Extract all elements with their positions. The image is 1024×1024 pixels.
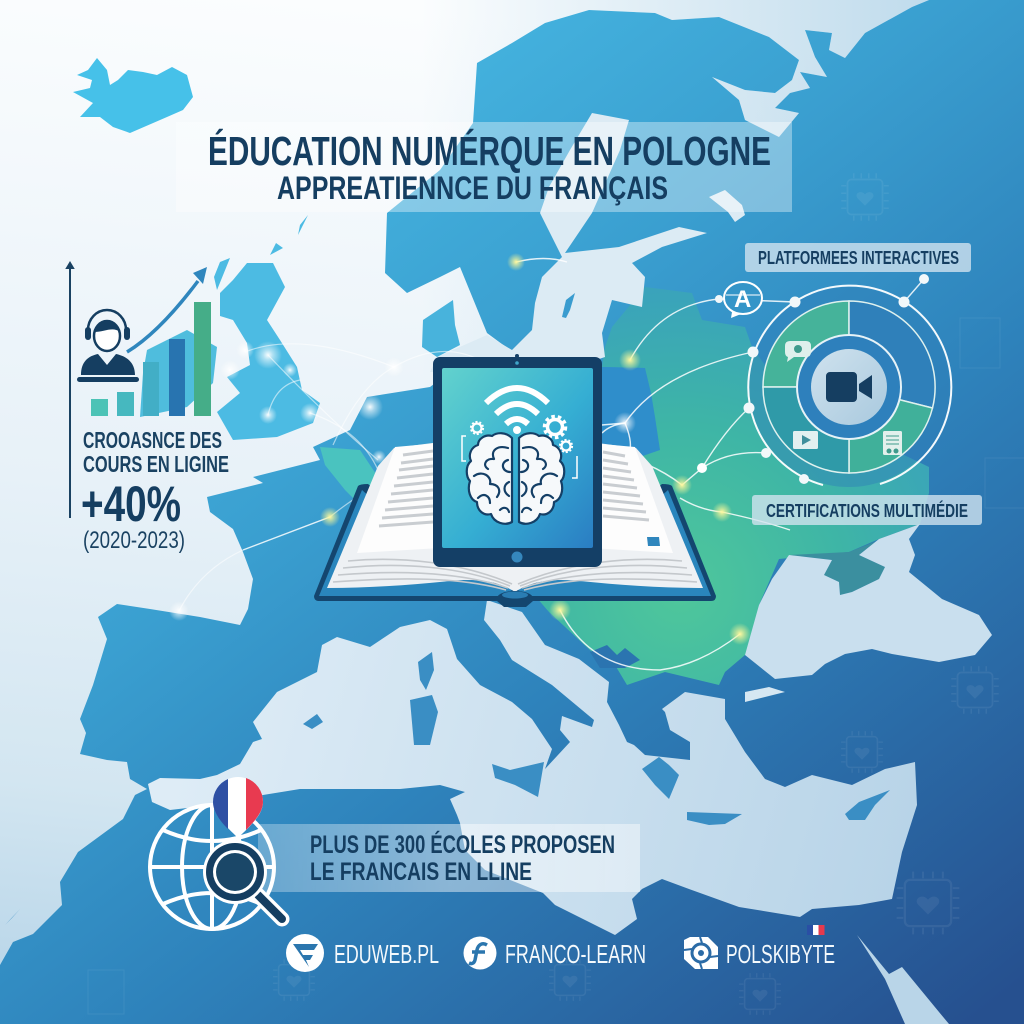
icon: brackets xyxy=(462,436,577,478)
pale sea: Baltic xyxy=(430,113,707,372)
pale sea: Marmara xyxy=(745,687,785,702)
growth label: CROOASNCE DES xyxy=(83,427,222,453)
logo: franco-learn xyxy=(464,936,496,970)
logo: polskibyte xyxy=(684,937,718,969)
green region: Eastern Europe xyxy=(530,287,929,685)
title panel xyxy=(176,122,792,212)
bookmark square xyxy=(647,537,660,546)
vertical axis xyxy=(67,263,73,518)
left page lines xyxy=(379,451,433,526)
ring nodes xyxy=(715,274,929,484)
cover inner band xyxy=(319,490,711,596)
Scottish islands xyxy=(214,215,308,290)
right pages xyxy=(515,442,703,592)
pale lake: Ladoga xyxy=(709,190,745,222)
pale sea: Red Sea xyxy=(857,935,949,1024)
outer ring xyxy=(748,286,951,485)
growth label: COURS EN LIGINE xyxy=(83,451,229,477)
pale sea: Mediterranean xyxy=(148,600,917,935)
icon: gears xyxy=(471,416,572,452)
growth panel xyxy=(67,263,229,554)
spine xyxy=(497,591,533,605)
open book xyxy=(314,442,716,607)
left pages xyxy=(327,442,515,592)
icon: chat xyxy=(785,341,811,362)
icon: globe with flag and magnifier xyxy=(150,777,282,929)
period: (2020-2023) xyxy=(83,527,185,554)
label: platforms xyxy=(745,243,971,272)
pale sea: Black Sea xyxy=(745,524,992,679)
Denmark xyxy=(422,300,460,357)
icon: person with headset xyxy=(77,310,139,382)
Italy xyxy=(440,600,594,769)
segment: lower left xyxy=(763,387,849,473)
circular diagram xyxy=(715,274,951,487)
right page lines xyxy=(603,452,649,520)
logo: eduweb xyxy=(286,934,324,972)
blue patch: Poland xyxy=(602,367,660,470)
left top page xyxy=(357,443,440,553)
globe xyxy=(150,805,274,929)
icon: video camera xyxy=(826,372,872,402)
centre disc xyxy=(811,349,887,425)
tablet xyxy=(433,354,602,567)
footer logos xyxy=(286,925,835,972)
inner band xyxy=(797,335,901,439)
text: franco-learn: FRANCO-LEARN xyxy=(505,939,646,969)
teal region: southern Ukraine and Crimea xyxy=(789,524,920,595)
network lines and nodes xyxy=(179,258,924,670)
segment: top right xyxy=(849,301,935,408)
icon: wifi xyxy=(486,388,548,433)
growth figure: +40% xyxy=(81,476,181,532)
Iceland xyxy=(73,58,193,133)
book cover xyxy=(314,484,716,607)
icon: letter A bubble: A xyxy=(734,286,751,313)
icon: certificate xyxy=(883,431,902,455)
right top page xyxy=(590,443,673,553)
blue patches: Balkans xyxy=(590,645,640,668)
mini flag xyxy=(807,925,824,935)
text: eduweb: EDUWEB.PL xyxy=(334,939,439,969)
schools panel xyxy=(258,824,640,892)
schools text: LE FRANCAIS EN LLINE xyxy=(310,858,532,886)
label: certifications xyxy=(752,495,982,525)
Mediterranean islands xyxy=(5,652,890,925)
magnifier xyxy=(203,840,282,919)
schools text: PLUS DE 300 ÉCOLES PROPOSEN xyxy=(310,830,615,859)
faint chip icons xyxy=(88,173,1024,1015)
icon: letter A bubble xyxy=(724,282,762,318)
Gotland island xyxy=(562,293,575,318)
page edge curves xyxy=(333,559,697,590)
pin flag xyxy=(213,777,263,838)
segment: top left xyxy=(763,301,849,387)
arrow head xyxy=(193,267,207,284)
main title: ÉDUCATION NUMÉRQUE EN POLOGNE xyxy=(208,128,771,174)
growth arrow xyxy=(127,281,198,352)
text: polskibyte: POLSKIBYTE xyxy=(726,939,835,969)
icon: play xyxy=(793,431,818,449)
subtitle: APPREATIENNCE DU FRANÇAIS xyxy=(277,170,668,206)
segment: lower right xyxy=(849,387,932,473)
tablet screen xyxy=(442,368,593,548)
glowing nodes xyxy=(169,253,751,645)
schools text xyxy=(310,830,615,886)
Great Britain xyxy=(217,263,320,440)
Ireland xyxy=(140,330,217,417)
growth label xyxy=(83,427,229,477)
icon: brain xyxy=(467,433,564,524)
teal patch: northern France xyxy=(320,447,380,500)
bar chart xyxy=(91,302,211,416)
